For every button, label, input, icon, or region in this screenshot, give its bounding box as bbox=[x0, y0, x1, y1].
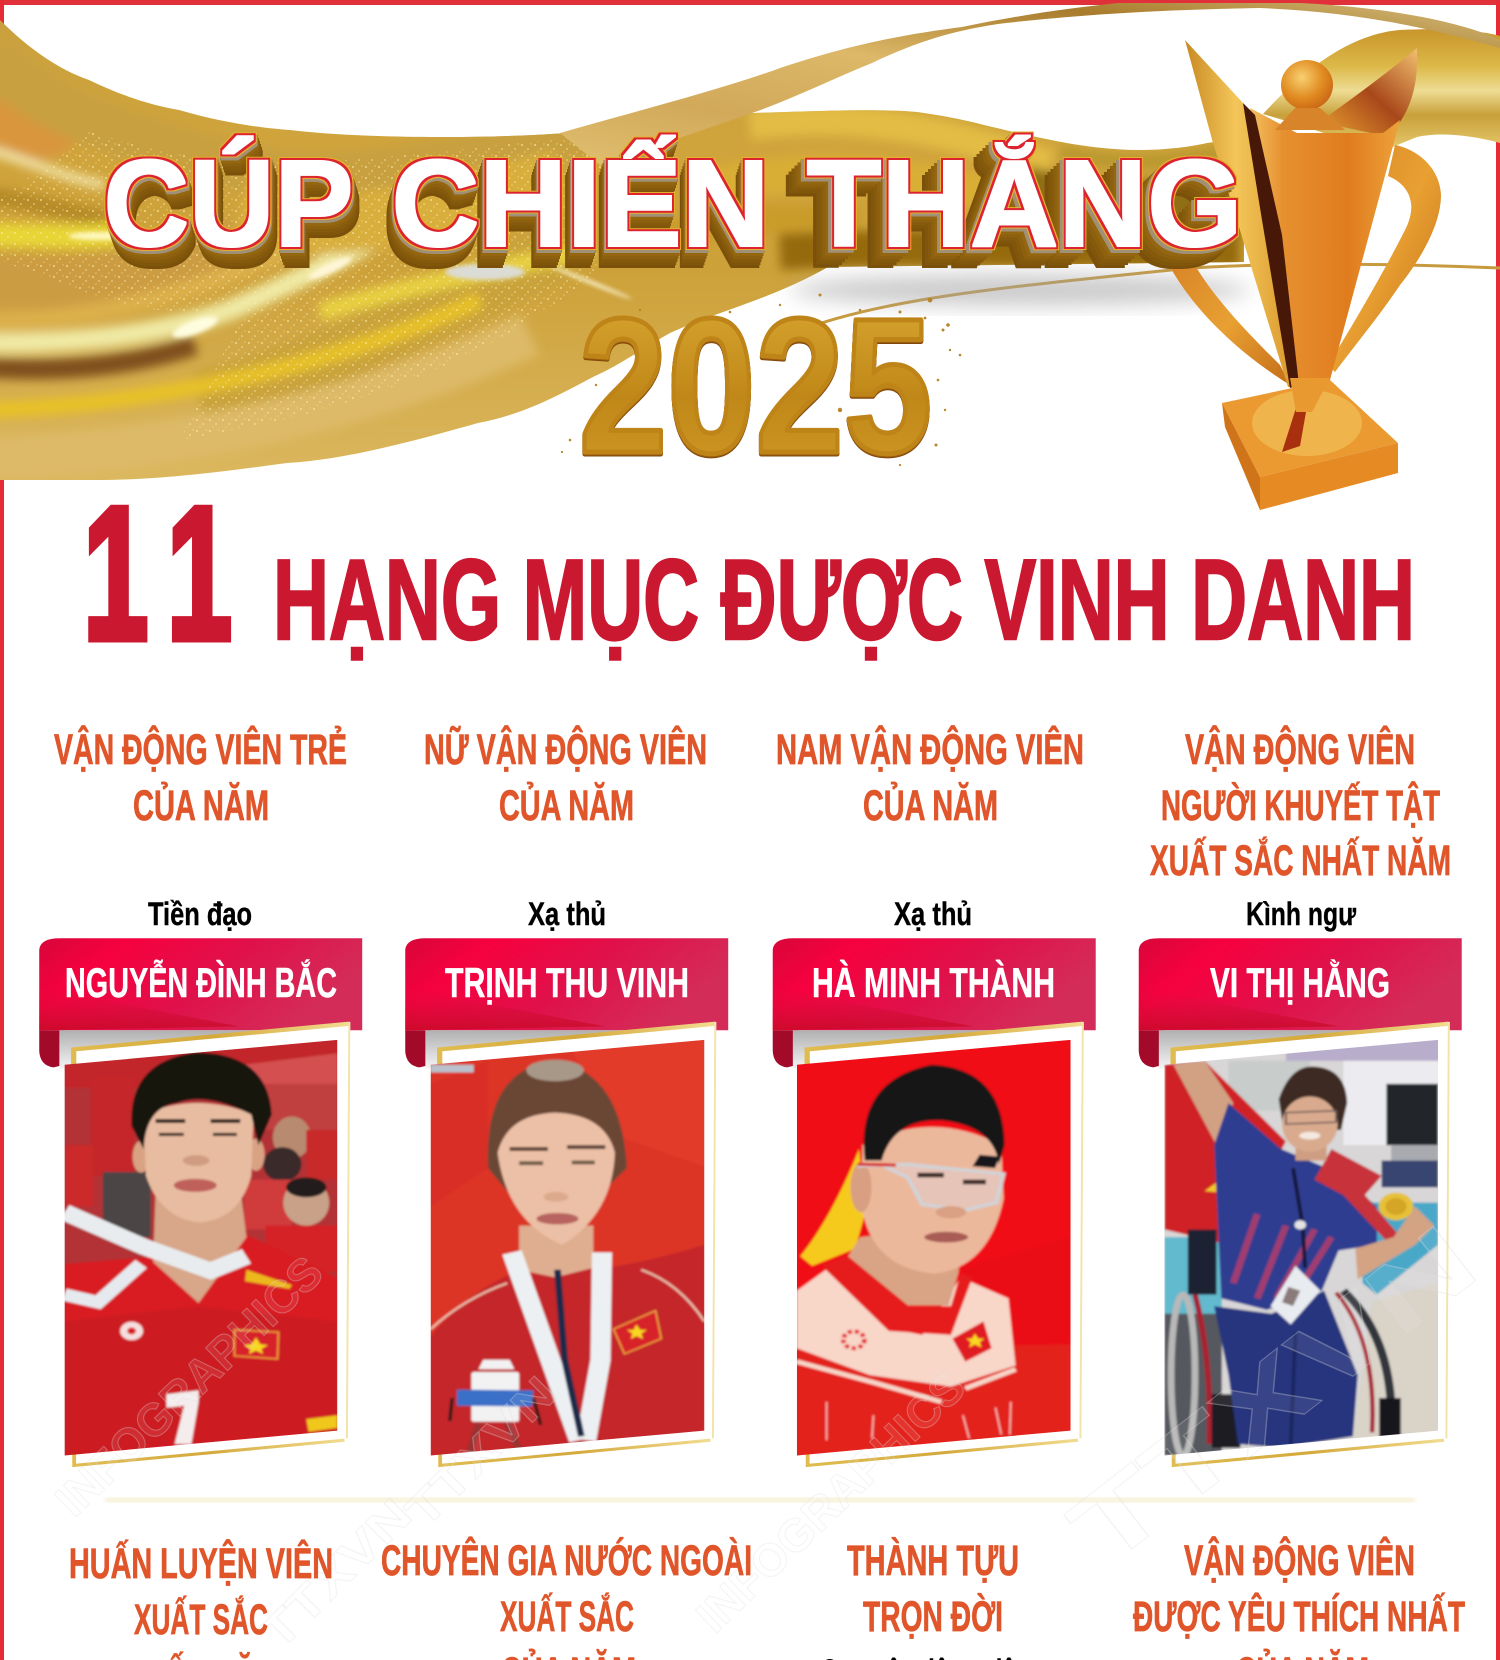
divider bbox=[105, 1498, 1415, 1502]
white shoulders bbox=[797, 1266, 1016, 1387]
panel: Nguyễn Đình Bắc bbox=[39, 938, 362, 1468]
heading: 11 categories bbox=[83, 468, 1415, 680]
stripes bbox=[797, 1362, 941, 1402]
neck bbox=[519, 1226, 593, 1277]
category: lifetime achievement bbox=[821, 1537, 1029, 1660]
pants bbox=[1214, 1291, 1358, 1448]
watermarks: TTXVN bbox=[250, 1488, 421, 1659]
number 11: 11 bbox=[83, 468, 232, 680]
category: lifetime achievement: THÀNH TỰU bbox=[847, 1537, 1019, 1585]
medal ribbon bbox=[65, 1212, 246, 1271]
panel: Vi Thị Hằng bbox=[1139, 938, 1462, 1468]
blinder bbox=[973, 1155, 1000, 1168]
sport labels: Xạ thủ bbox=[528, 896, 606, 932]
hair bbox=[864, 1065, 1005, 1164]
gold sparkle dots bbox=[561, 294, 961, 466]
sport labels: Kình ngư bbox=[1246, 896, 1357, 932]
lanyard bbox=[1293, 1168, 1305, 1268]
thin gold line bbox=[770, 264, 1500, 345]
sport labels bbox=[148, 896, 1357, 932]
category: female athlete: NỮ VẬN ĐỘNG VIÊN bbox=[424, 725, 707, 774]
hair bbox=[488, 1061, 627, 1191]
glasses bbox=[858, 1164, 1004, 1210]
flag bbox=[234, 1330, 278, 1359]
trophy right blade bbox=[1320, 48, 1417, 135]
category: best coach: HUẤN LUYỆN VIÊN bbox=[69, 1539, 333, 1588]
watermarks bbox=[45, 1204, 1497, 1659]
sport labels: Xạ thủ bbox=[894, 896, 972, 932]
category: foreign expert bbox=[381, 1536, 752, 1660]
category headings row 2 bbox=[69, 1536, 1465, 1660]
windows bbox=[1286, 1038, 1439, 1061]
watermarks: TTXVN bbox=[395, 1366, 566, 1537]
category: young athlete bbox=[54, 725, 347, 830]
banner and frame bbox=[405, 938, 728, 1468]
category: female athlete: CỦA NĂM bbox=[499, 781, 634, 830]
trophy left handle bbox=[1170, 262, 1290, 385]
title: THẮNG bbox=[806, 135, 1242, 273]
jersey number bbox=[167, 1390, 199, 1444]
neck bbox=[848, 1226, 965, 1305]
trophy left blade bbox=[1185, 40, 1297, 387]
category: male athlete: NAM VẬN ĐỘNG VIÊN bbox=[776, 725, 1084, 774]
arm bbox=[961, 1237, 1071, 1371]
features bbox=[159, 1133, 184, 1136]
photo bbox=[428, 1038, 708, 1459]
photo bbox=[62, 1038, 340, 1459]
category: female athlete bbox=[424, 725, 707, 830]
neck bbox=[153, 1195, 246, 1303]
logo bbox=[843, 1331, 864, 1348]
red flag bbox=[1164, 1061, 1286, 1245]
yellow flag star bbox=[800, 1149, 865, 1266]
category: best coach bbox=[69, 1539, 333, 1660]
hair bbox=[131, 1052, 272, 1149]
banner and frame bbox=[773, 938, 1096, 1468]
face bbox=[498, 1113, 615, 1245]
panel: Trịnh Thu Vinh bbox=[405, 938, 728, 1468]
athlete name: NGUYỄN ĐÌNH BẮC bbox=[65, 958, 337, 1006]
title: CÚP bbox=[104, 136, 354, 273]
category: young athlete: CỦA NĂM bbox=[133, 781, 269, 830]
raised arm bbox=[1173, 1061, 1233, 1145]
category: most favourite athlete bbox=[1133, 1536, 1465, 1660]
lanyards bbox=[512, 1252, 579, 1440]
category: best coach: XUẤT SẮC bbox=[134, 1595, 268, 1644]
category: male athlete: CỦA NĂM bbox=[863, 781, 998, 830]
category: foreign expert: XUẤT SẮC bbox=[500, 1592, 634, 1641]
trophy base bbox=[1222, 378, 1398, 510]
category: male athlete bbox=[776, 725, 1084, 830]
year 2025: 2025 bbox=[579, 278, 932, 493]
category headings row 1 bbox=[54, 725, 1451, 885]
trophy cup body bbox=[1250, 108, 1400, 392]
flag bbox=[613, 1311, 661, 1354]
watermarks: INFOGRAPHICS bbox=[45, 1246, 333, 1526]
screen bbox=[1386, 1084, 1438, 1145]
jersey bbox=[64, 1234, 338, 1322]
trophy ball finial bbox=[1275, 60, 1345, 130]
floor bbox=[1353, 1283, 1438, 1444]
photo bbox=[793, 1038, 1075, 1459]
scarf bbox=[1315, 1149, 1401, 1241]
face bbox=[144, 1103, 254, 1223]
jersey bbox=[1214, 1103, 1377, 1310]
banner and frame bbox=[1139, 938, 1462, 1468]
panel: Hà Minh Thành bbox=[773, 938, 1096, 1468]
glitter bbox=[0, 130, 640, 440]
category: young athlete: VẬN ĐỘNG VIÊN TRẺ bbox=[54, 725, 347, 774]
sport labels: Tiền đạo bbox=[148, 896, 252, 932]
stripes bbox=[245, 1270, 292, 1289]
arm with medal bbox=[1355, 1206, 1434, 1279]
photo bbox=[1162, 1038, 1441, 1459]
pool bbox=[1362, 1203, 1438, 1295]
flag bbox=[952, 1321, 992, 1362]
trophy bbox=[1170, 40, 1441, 510]
light flares bbox=[68, 232, 632, 342]
wheelchair bbox=[1171, 1295, 1195, 1455]
gold sweep ribbon bbox=[560, 3, 1500, 165]
title: CHIẾN bbox=[392, 136, 770, 273]
jersey lower bbox=[797, 1344, 1071, 1459]
athlete name: VI THỊ HẰNG bbox=[1210, 959, 1390, 1006]
header: gold ribbon bbox=[0, 0, 1500, 490]
main wave body bbox=[0, 0, 1260, 490]
face bbox=[861, 1127, 1004, 1274]
badge bbox=[471, 1372, 519, 1422]
id badge bbox=[1271, 1266, 1320, 1324]
trophy dark inner blade bbox=[1243, 103, 1299, 388]
ears bbox=[133, 1141, 150, 1173]
gray title shadow bbox=[790, 274, 1250, 306]
red collar bbox=[822, 1252, 973, 1335]
watermarks: TTXVN bbox=[1050, 1204, 1497, 1587]
category: foreign expert: CHUYÊN GIA NƯỚC NGOÀI bbox=[381, 1536, 752, 1585]
right gold ribbon bbox=[1263, 29, 1500, 152]
category: disabled athlete bbox=[1150, 725, 1451, 885]
banner and frame bbox=[39, 938, 362, 1468]
title bbox=[104, 135, 1242, 273]
neck and head bbox=[1295, 1130, 1327, 1161]
trophy right handle bbox=[1328, 145, 1441, 372]
athlete name: TRỊNH THU VINH bbox=[445, 959, 689, 1006]
category: lifetime achievement: TRỌN ĐỜI bbox=[863, 1592, 1003, 1641]
watermarks: INFOGRAPHICS bbox=[686, 1360, 975, 1642]
athlete name: HÀ MINH THÀNH bbox=[812, 959, 1055, 1006]
jacket bbox=[431, 1245, 704, 1459]
chest logo bbox=[120, 1322, 143, 1340]
